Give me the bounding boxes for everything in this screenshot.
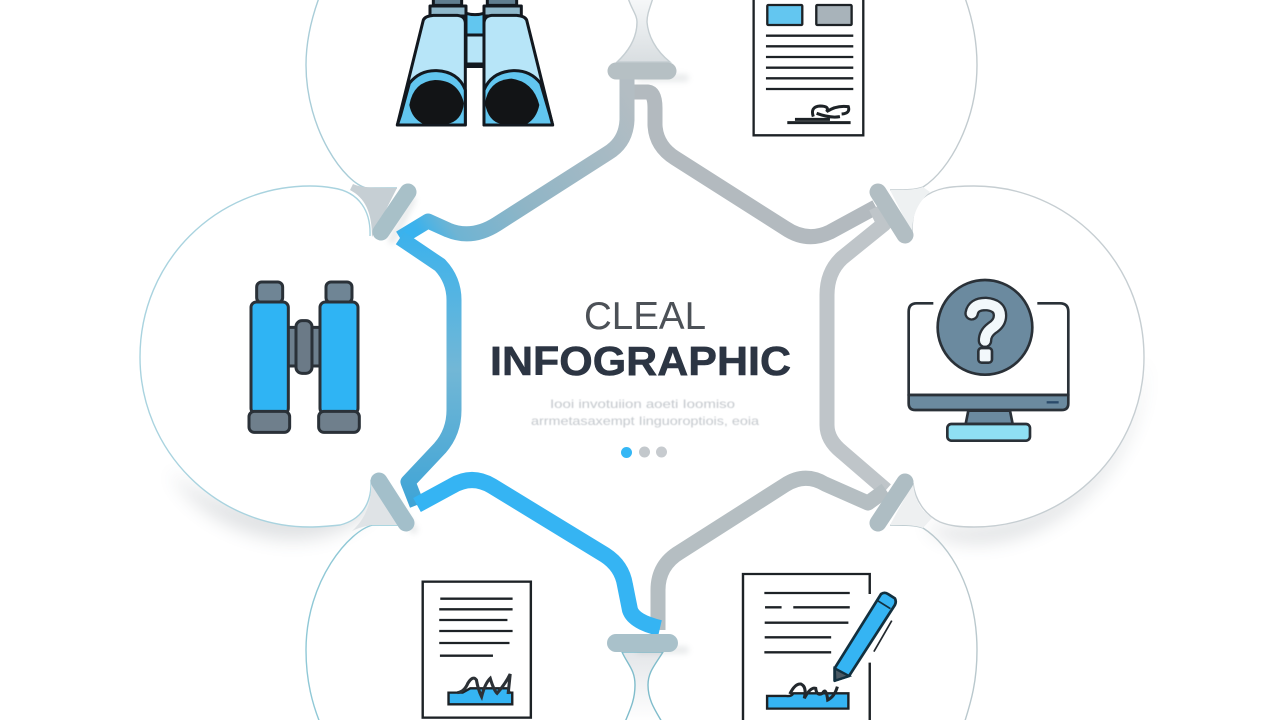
circle: signed page [306, 525, 400, 720]
signature [787, 106, 851, 123]
circle: document with image blocks [890, 0, 977, 190]
pipe: lower right [658, 478, 886, 630]
signature block [449, 688, 512, 704]
icon: signed page [423, 582, 531, 718]
circle: side binoculars [140, 186, 371, 527]
text lines [764, 593, 850, 652]
circle: monitor question [912, 186, 1144, 527]
title line: CLEAL: CLEAL [584, 295, 706, 338]
text lines [766, 36, 853, 89]
soft circle shadows [170, 357, 1144, 543]
connector pipes [400, 76, 886, 630]
pipe: top to upper left [400, 76, 627, 238]
connector cap shadows [385, 78, 685, 650]
description text: Iooi invotuiion aoeti Ioomiso [550, 397, 735, 411]
cap: upper left [381, 192, 408, 232]
funnel: lower left [352, 482, 400, 531]
image block gray [816, 5, 852, 25]
icon: side binoculars [249, 282, 359, 432]
title [490, 295, 791, 384]
pipe: lower left blue [417, 480, 660, 628]
pipe: upper right [634, 92, 876, 237]
icon: front binoculars [397, 0, 553, 125]
cap: lower right [878, 482, 905, 523]
image block blue [767, 5, 802, 25]
icon: monitor with question mark [909, 280, 1068, 441]
icon: page with pen [743, 574, 896, 720]
funnel: upper right [890, 187, 930, 233]
pen [835, 593, 896, 681]
circle: binoculars front [306, 0, 397, 188]
pipe: left vertical [400, 238, 454, 505]
cap: upper right [878, 192, 905, 235]
circle: binoculars front inner edge [617, 0, 670, 62]
description text [531, 397, 759, 428]
text lines [439, 599, 513, 656]
cap: top [616, 62, 668, 80]
question mark [972, 304, 1000, 363]
signature block [767, 693, 848, 709]
pipe: right vertical [827, 207, 886, 490]
title line: INFOGRAPHIC: INFOGRAPHIC [490, 338, 791, 384]
circle: page with pen [890, 525, 977, 720]
cap: lower left [379, 481, 406, 523]
funnel: bottom [622, 652, 663, 720]
connector caps [379, 71, 905, 643]
cap: bottom [616, 634, 669, 652]
funnel: upper left [350, 184, 397, 237]
icon: document with image blocks [754, 0, 863, 135]
description text: arrmetasaxempt Iinguoroptiois, eoia [531, 414, 759, 428]
pagination dots [621, 446, 667, 458]
funnel: lower right [890, 483, 932, 528]
